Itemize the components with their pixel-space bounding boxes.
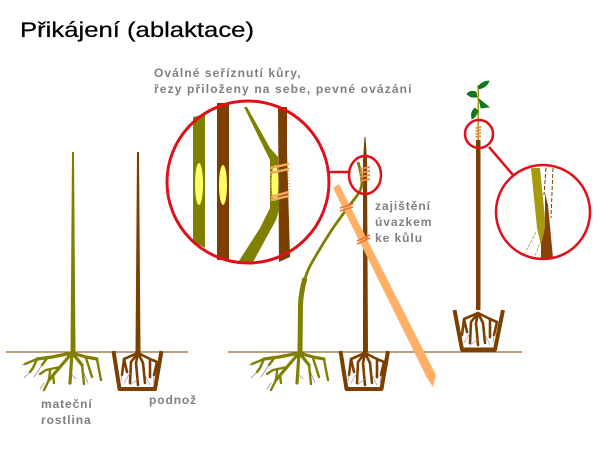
label: mother plant: rostlina bbox=[41, 413, 92, 427]
diagonal connector bbox=[489, 147, 513, 175]
caption: tie to stake: úvazkem bbox=[375, 215, 432, 229]
small magnifier circle bbox=[349, 156, 381, 194]
ties on graft bbox=[360, 167, 370, 181]
caption: tie to stake: ke kůlu bbox=[375, 231, 423, 245]
lens: healed graft bbox=[496, 165, 590, 259]
ground line bbox=[6, 351, 522, 353]
support stake bbox=[333, 184, 436, 387]
label: rootstock: podnož bbox=[149, 393, 197, 407]
caption: tie to stake: zajištění bbox=[375, 199, 431, 213]
caption: cuts: řezy přiloženy na sebe, pevné ovázání bbox=[154, 82, 412, 96]
rootstock in pot bbox=[114, 152, 162, 389]
upper magnifier circle bbox=[465, 120, 493, 148]
caption: cuts: Oválné seříznutí kůry, bbox=[154, 66, 301, 80]
connector bbox=[329, 171, 349, 173]
mother plant bbox=[22, 152, 101, 390]
label: mother plant: mateční bbox=[41, 397, 93, 411]
grafted pair bbox=[249, 137, 388, 390]
grown plant with leaves bbox=[454, 81, 503, 350]
title: Přikájení (ablaktace) bbox=[20, 18, 254, 42]
lens: detail of cuts bbox=[167, 101, 329, 264]
